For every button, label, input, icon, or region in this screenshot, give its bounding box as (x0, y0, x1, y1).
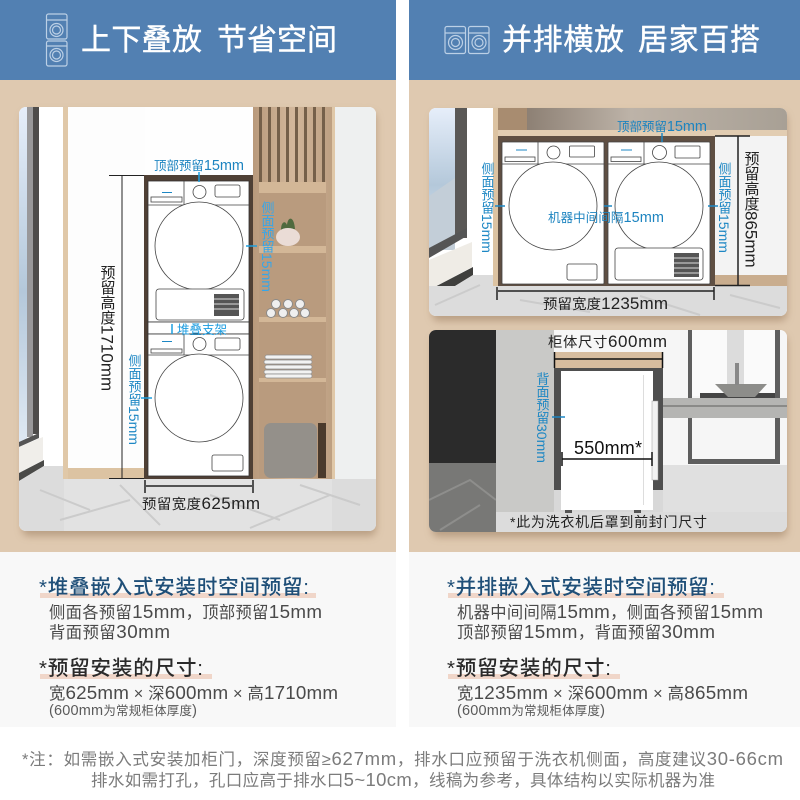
size heading: *预留安装的尺寸: (39, 657, 203, 680)
plant pot (276, 219, 300, 246)
panel: side view scene (429, 330, 787, 532)
label: back clearance: 背面预留 30mm (534, 372, 550, 463)
icon: side by side washers (445, 26, 489, 54)
label: depth note: *此为洗衣机后罩到前封门尺寸 (510, 514, 707, 530)
height dimension line (109, 176, 144, 478)
floor (19, 466, 376, 531)
dimension lines (554, 352, 662, 466)
cabinet top (498, 108, 527, 130)
heading: right: 并排横放 (502, 24, 624, 57)
width dimension line (145, 480, 253, 493)
label: stacking bracket: 堆叠支架 (177, 323, 227, 337)
bathroom background (663, 330, 787, 512)
cabinet niche (554, 368, 663, 490)
wooden shelving unit (253, 107, 332, 479)
label: reserved width: 预留宽度1235mm (543, 294, 668, 313)
label: side clearance lower: 侧面预留 15mm (126, 354, 142, 445)
size note: (600mm为常规柜体厚度) (457, 703, 605, 719)
label: reserved height: 预留高度 1710mm (98, 265, 116, 391)
concrete column (496, 330, 554, 512)
dark wall and floor (429, 330, 496, 532)
label: reserved width: 预留宽度625mm (142, 494, 260, 513)
image shadows (22, 112, 787, 537)
note body (49, 601, 322, 642)
heading: left: 节省空间 (217, 24, 337, 57)
size body: 宽625mm × 深600mm × 高1710mm (49, 682, 338, 703)
window (429, 108, 473, 302)
header band: right (409, 0, 800, 80)
panel: side by side scene (429, 108, 787, 316)
note body (457, 601, 763, 642)
label: middle gap: 机器中间间隔15mm (548, 210, 664, 226)
stacked washer outline (144, 175, 253, 479)
washer right (608, 142, 710, 284)
footnote: 排水如需打孔，孔口应高于排水口5~10cm，线稿为参考，具体结构以实际机器为准 (91, 769, 715, 790)
clearance arrows (141, 172, 257, 398)
window (19, 107, 44, 481)
label: reserved height: 预留高度 865mm (742, 151, 760, 268)
size note: (600mm为常规柜体厚度) (49, 703, 197, 719)
washer left (502, 142, 604, 284)
header band: left (0, 0, 396, 80)
floor (429, 285, 787, 316)
panel: left column background (0, 80, 396, 552)
washer side (561, 371, 658, 513)
footnote (22, 748, 783, 790)
clearance arrow (552, 416, 565, 418)
label: depth: 550mm* (574, 438, 642, 458)
note body: 背面预留30mm (49, 621, 170, 642)
clearance arrows (495, 133, 718, 206)
label: side clearance left: 侧面预留 15mm (479, 162, 495, 253)
panel: right column background (409, 80, 800, 552)
highlight (40, 674, 212, 679)
note heading: *并排嵌入式安装时空间预留: (447, 576, 715, 599)
panel: stacked installation scene (19, 107, 376, 531)
niche (498, 136, 715, 286)
heading: right: 居家百搭 (638, 24, 760, 57)
note body: 机器中间间隔15mm，侧面各预留15mm (457, 601, 763, 622)
note body: 侧面各预留15mm，顶部预留15mm (49, 601, 322, 622)
label: side clearance upper: 侧面预留 15mm (259, 201, 275, 292)
heading: left: 上下叠放 (81, 24, 202, 57)
highlight (448, 593, 724, 598)
note heading: *堆叠嵌入式安装时空间预留: (39, 576, 309, 599)
size heading: *预留安装的尺寸: (447, 657, 611, 680)
wall right (335, 107, 376, 498)
label: side clearance right: 侧面预留 15mm (716, 162, 732, 253)
plates (264, 355, 312, 378)
panel: right notes (409, 552, 800, 727)
label: cabinet size: 柜体尺寸600mm (548, 332, 667, 351)
basket (264, 423, 317, 478)
label: top clearance: 顶部预留15mm (617, 119, 707, 135)
icon: stacked washers (46, 14, 67, 66)
highlight (448, 674, 620, 679)
size body: 宽1235mm × 深600mm × 高865mm (457, 682, 748, 703)
cabinet top (554, 352, 663, 368)
highlight (40, 593, 316, 598)
dimension lines (497, 136, 750, 300)
label: top clearance: 顶部预留15mm (154, 158, 244, 174)
sink (715, 384, 767, 397)
towels (266, 300, 310, 318)
panel: left notes (0, 552, 396, 727)
footnote: *注：如需嵌入式安装加柜门，深度预留≥627mm，排水口应预留于洗衣机侧面，高度建议30-66cm (22, 748, 783, 769)
note body: 顶部预留15mm，背面预留30mm (457, 621, 715, 642)
